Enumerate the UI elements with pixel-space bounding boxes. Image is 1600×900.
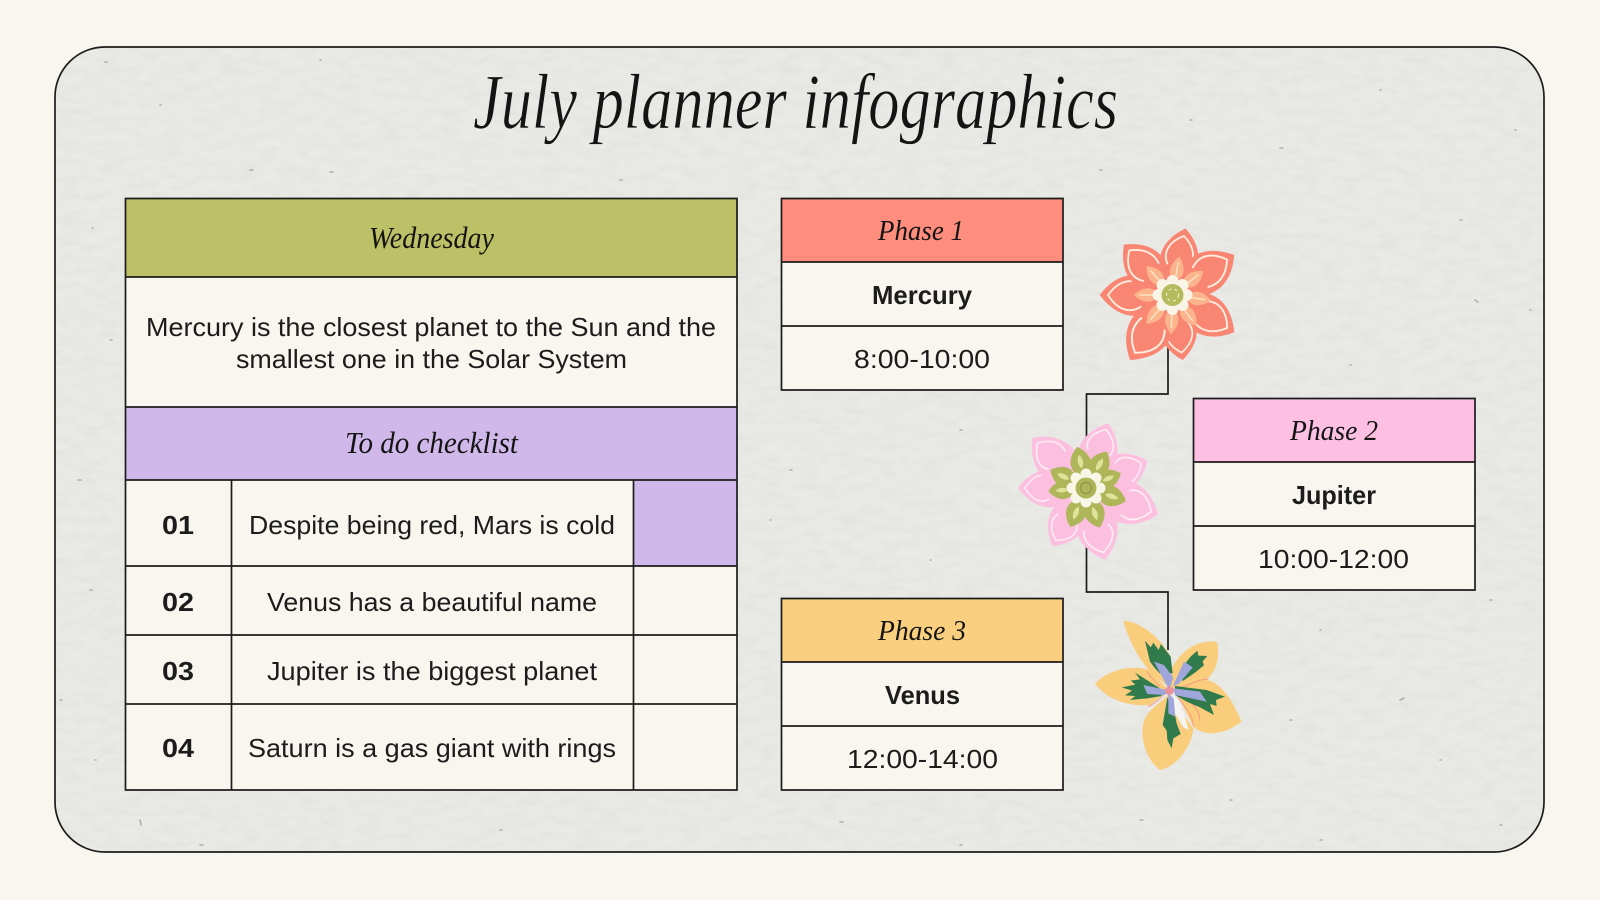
checklist item 03: Jupiter is the biggest planet [267,656,598,686]
checklist item 04 [125,704,737,790]
checklist item 02: Venus has a beautiful name [267,587,597,617]
icon: pink flower [1018,417,1166,565]
checklist item 02 [125,566,737,635]
checklist item 03 [125,635,737,704]
panel: Phase 3: Venus [885,680,960,710]
panel: Phase 2: 10:00-12:00 [1258,544,1409,574]
icon: salmon flower [1100,225,1245,372]
Wednesday header [125,198,737,277]
checklist item 01: Despite being red, Mars is cold [249,510,615,540]
panel: Phase 2: Phase 2 [1289,415,1378,447]
Wednesday header: Wednesday [369,220,494,255]
panel: Wednesday table [125,198,737,790]
icon: yellow flower [1095,621,1242,770]
checklist item 01 [125,480,737,566]
checklist item 04: Saturn is a gas giant with rings [248,733,616,763]
checklist item 04: 04 [162,733,195,763]
checklist header: To do checklist [345,425,519,460]
description [125,277,737,407]
checklist item 01: 01 [162,510,194,540]
panel: Phase 3: Phase 3 [877,615,966,647]
panel: Phase 2: Jupiter [1292,480,1376,510]
connector lines [1086,340,1168,650]
title: July planner infographics [473,58,1118,145]
checklist item 02: 02 [162,587,194,617]
panel: Phase 3 [781,598,1063,790]
panel: Phase 1: Mercury [872,280,973,310]
description: smallest one in the Solar System [236,344,627,374]
panel: Phase 3: 12:00-14:00 [847,744,998,774]
panel: Phase 1 [781,198,1063,390]
panel: Phase 1: 8:00-10:00 [854,344,990,374]
panel: Phase 1: Phase 1 [877,215,964,247]
panel: Phase 2 [1193,398,1475,590]
description: Mercury is the closest planet to the Sun and the [146,312,716,342]
checklist header [125,407,737,480]
checklist item 03: 03 [162,656,194,686]
